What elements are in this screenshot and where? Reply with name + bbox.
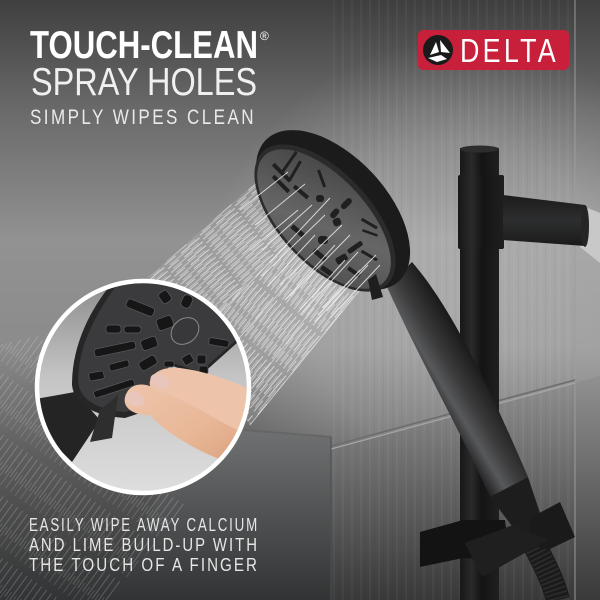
lower finger [125, 384, 245, 460]
hand shower handle [387, 262, 528, 497]
circular detail inset: finger wiping spray holes [34, 278, 252, 496]
title [30, 24, 269, 129]
caption line 3: THE TOUCH OF A FINGER [29, 554, 259, 575]
registered mark: ® [260, 29, 269, 43]
logo: Delta [418, 30, 569, 70]
logo wordmark: DELTA [460, 32, 559, 69]
spray mode lever [368, 274, 383, 300]
caption line 1: EASILY WIPE AWAY CALCIUM [29, 514, 259, 535]
spray nozzles on shower head [272, 151, 378, 278]
caption line 2: AND LIME BUILD-UP WITH [29, 534, 259, 555]
title line 2: SPRAY HOLES [31, 61, 257, 104]
inset shower handle [40, 392, 98, 462]
hand shower hose [532, 540, 558, 600]
hand shower neck [490, 477, 549, 540]
hand shower holder clip, front part [465, 502, 575, 577]
inset shower head face [72, 287, 237, 418]
inset centre button [170, 317, 200, 345]
hand shower holder clip, back part [420, 520, 510, 567]
inset spray holes [88, 289, 229, 398]
title line 1: TOUCH-CLEAN [30, 24, 258, 67]
subtitle: SIMPLY WIPES CLEAN [30, 106, 256, 129]
water spray [0, 177, 365, 600]
inset spray lever [90, 395, 118, 442]
upper finger [150, 368, 247, 430]
icon: Delta emblem [423, 35, 453, 65]
caption [29, 514, 259, 575]
water jets leaving the nozzles [240, 172, 380, 322]
slide bar and wall bracket [458, 146, 589, 600]
shower head [227, 102, 439, 322]
